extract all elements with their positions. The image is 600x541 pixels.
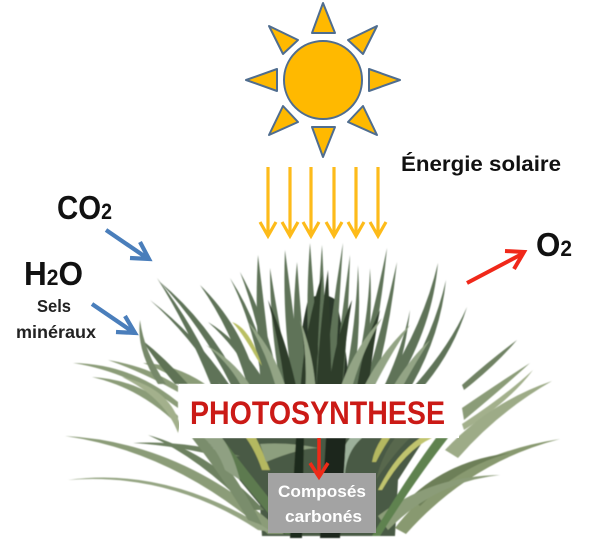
label: O2: O2 — [536, 226, 572, 263]
arrow: O2 release — [467, 251, 524, 283]
arrow: to carbon compounds — [310, 438, 328, 477]
box: carbon compounds: Composés — [278, 482, 366, 501]
box: carbon compounds: carbonés — [285, 507, 362, 526]
side leaves right — [372, 340, 560, 536]
label: solar energy: Énergie solaire — [401, 153, 561, 176]
box: carbon compounds — [268, 473, 376, 533]
label: CO2: CO2 — [57, 189, 112, 226]
label: H2O: H2O — [24, 255, 83, 292]
lower centre leaves — [204, 438, 390, 538]
arrow: water and minerals intake — [92, 304, 135, 333]
label box: photosynthesis: PHOTOSYNTHESE — [190, 395, 445, 431]
label: mineral salts: minéraux — [16, 322, 96, 342]
arrow: CO2 intake — [106, 230, 149, 259]
side leaves left — [65, 320, 298, 534]
icon: sun — [246, 3, 400, 157]
label box: photosynthesis — [179, 384, 459, 438]
label: mineral salts: Sels — [37, 296, 71, 316]
plant: grass tuft — [65, 243, 560, 538]
label: mineral salts — [16, 296, 96, 342]
arrows: sunlight rays — [260, 167, 386, 236]
